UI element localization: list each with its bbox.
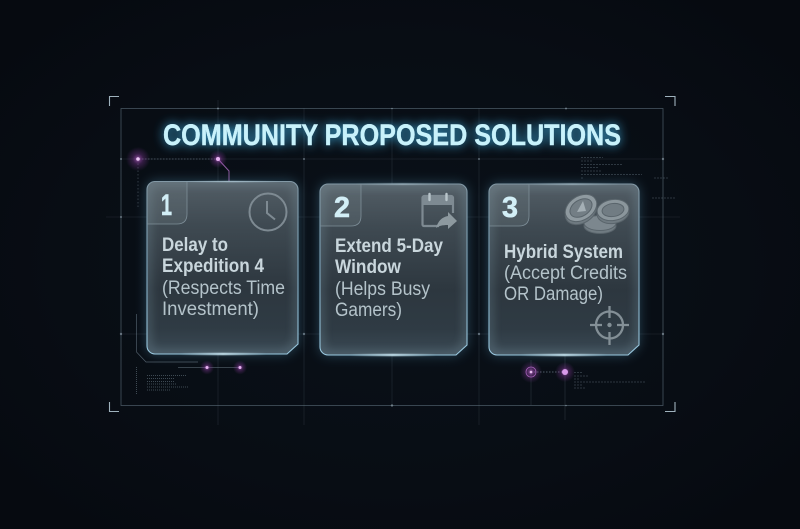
text: solution 2: (Helps Busy xyxy=(335,279,430,300)
icon: coins xyxy=(560,189,630,234)
purple node: top centre xyxy=(209,150,227,168)
text: solution 2: Extend 5-Day xyxy=(335,236,443,257)
hud frame xyxy=(110,96,675,412)
text: solution 3: Hybrid System xyxy=(504,242,623,263)
data readout: lower left xyxy=(136,367,188,394)
text: solution 2 xyxy=(335,236,443,321)
icon: clock xyxy=(250,194,286,230)
icon: target crosshair xyxy=(590,306,629,345)
infographic canvas xyxy=(106,96,680,425)
grid nodes xyxy=(120,108,664,407)
icon: calendar with arrow xyxy=(422,194,457,229)
number tab xyxy=(320,184,361,226)
number tab xyxy=(489,184,529,226)
number tab: 3 xyxy=(502,192,518,224)
title glow: COMMUNITY PROPOSED SOLUTIONS xyxy=(163,119,621,152)
panel: solution 1 xyxy=(146,181,298,400)
text: solution 1 xyxy=(162,235,285,320)
number tab: 2 xyxy=(334,192,350,224)
data readout: upper right xyxy=(581,158,676,198)
panel: solution 2 xyxy=(319,184,467,401)
corner brackets xyxy=(110,96,675,412)
text: solution 1: Expedition 4 xyxy=(162,256,264,277)
number tab xyxy=(147,182,187,224)
panel: solution 3 xyxy=(489,184,639,401)
data readout: lower right xyxy=(574,372,645,388)
purple node: bottom left pair xyxy=(200,360,247,374)
text: solution 1: Investment) xyxy=(162,299,259,320)
circuit grid background xyxy=(106,100,680,425)
circuit traces xyxy=(136,159,565,420)
purple node: bottom right pair xyxy=(520,361,575,383)
title: COMMUNITY PROPOSED SOLUTIONS xyxy=(163,119,621,152)
purple node: top left xyxy=(126,147,150,171)
text: solution 3 xyxy=(504,242,627,305)
text: solution 2: Gamers) xyxy=(335,300,402,321)
text: solution 3: (Accept Credits xyxy=(504,263,627,284)
text: solution 1: (Respects Time xyxy=(162,278,285,299)
text: solution 1: Delay to xyxy=(162,235,228,256)
number tab: 1 xyxy=(161,189,172,222)
text: solution 3: OR Damage) xyxy=(504,284,603,305)
text: solution 2: Window xyxy=(335,257,401,278)
